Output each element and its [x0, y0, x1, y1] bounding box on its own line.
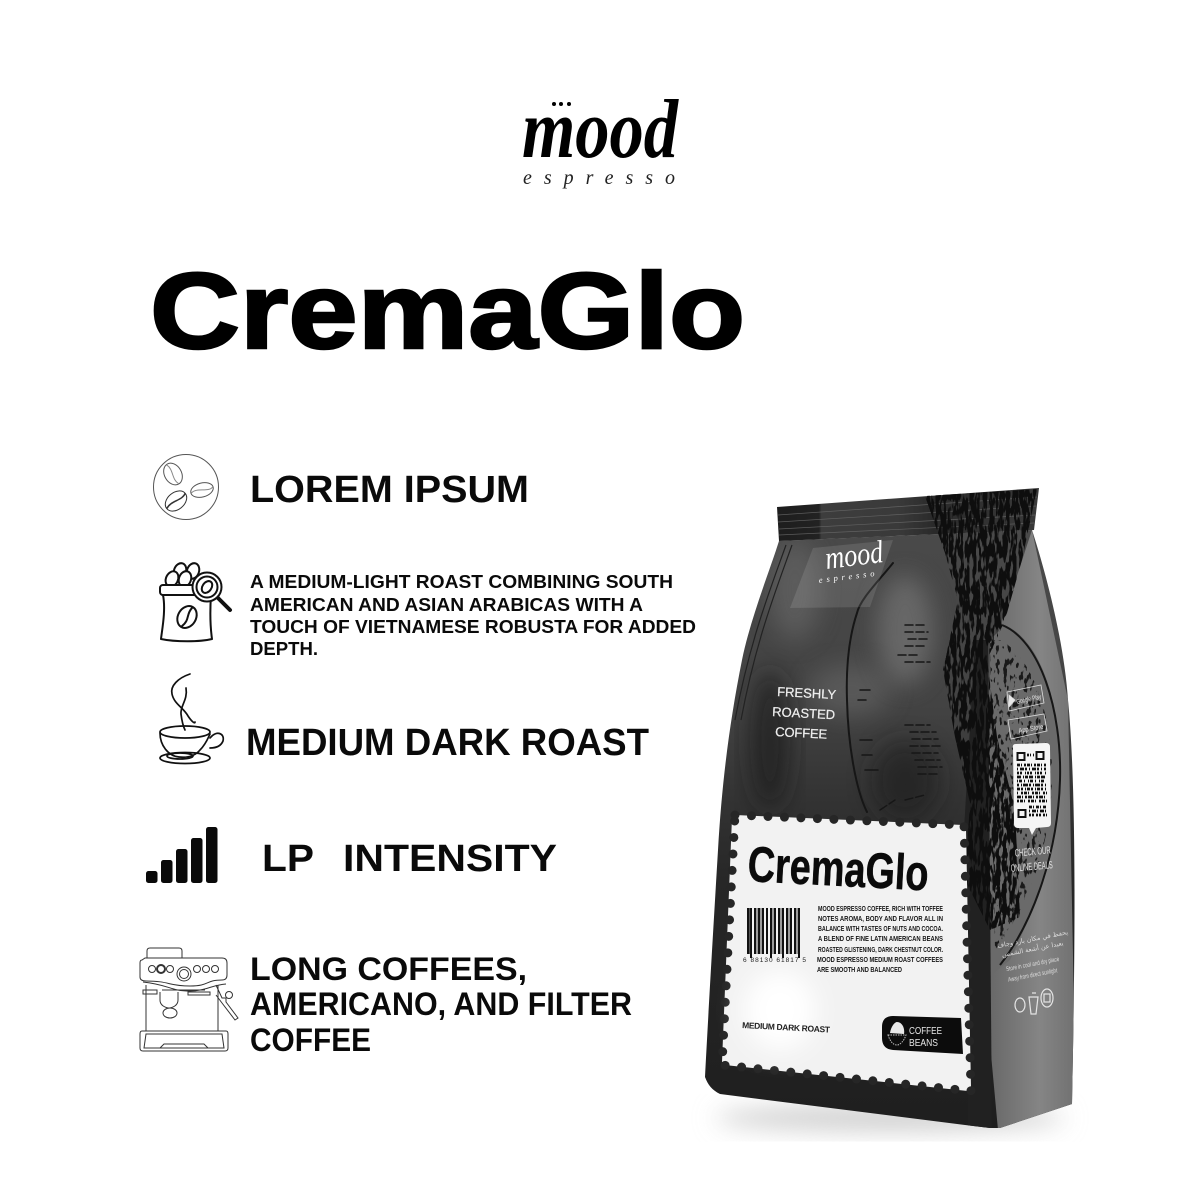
label description: ARE SMOOTH AND BALANCED: [817, 965, 903, 974]
text: online deals: CHECK OUR: [1014, 844, 1051, 860]
bag body: [700, 520, 1080, 1140]
coffee beans badge: [882, 1016, 963, 1054]
icon: espresso machine: [140, 948, 238, 1051]
text: storage instructions: بعيدا عن أشعة الشمس: [1001, 938, 1064, 959]
QR code: [1013, 743, 1051, 835]
bean outline and hatching: [847, 563, 942, 812]
icon: steaming cup: [160, 674, 223, 764]
front edge fold: [964, 640, 992, 1130]
text: roast description: DEPTH.: [250, 638, 318, 659]
label: intensity: LP: [262, 838, 314, 880]
label description: A BLEND OF FINE LATIN AMERICAN BEANS: [818, 934, 943, 943]
label description: BALANCE WITH TASTES OF NUTS AND COCOA.: [818, 924, 943, 933]
text: online deals: [1010, 844, 1053, 875]
coffee beans badge: COFFEE: [909, 1025, 942, 1037]
label: long coffees: AMERICANO, AND FILTER: [250, 986, 632, 1022]
recycling icons: [1015, 989, 1053, 1014]
gusset side panel: [986, 530, 1076, 1130]
text: roast description: AMERICAN AND ASIAN ARABICAS WITH A: [250, 594, 643, 615]
logo panel: [790, 540, 893, 608]
text: storage instructions: يحفظ في مكان بارد وجاف: [997, 928, 1069, 950]
icon: intensity bars: [146, 827, 218, 883]
white stamp label: [722, 815, 971, 1091]
gusset hatching: [990, 640, 1052, 950]
bag shadow: [715, 1105, 1065, 1131]
barcode: [743, 908, 806, 964]
logo: mood espresso: mood: [522, 83, 680, 176]
bean engraved band: [925, 489, 1037, 930]
side badges and QR: [1007, 685, 1051, 835]
text: freshly roasted coffee: FRESHLY: [777, 684, 837, 702]
store badges: [1007, 685, 1047, 739]
title: CremaGlo: [150, 250, 745, 371]
coffee bag product: [700, 488, 1080, 1140]
text: freshly roasted coffee: [772, 684, 837, 742]
label roast: MEDIUM DARK ROAST: [742, 1020, 831, 1035]
text: roast description: A MEDIUM-LIGHT ROAST COMBINING SOUTH: [250, 571, 673, 592]
text: storage instructions: Store in cool and dry place: [1006, 956, 1060, 973]
icon: coffee bag with magnifier: [160, 561, 230, 641]
label: lorem ipsum: LOREM IPSUM: [250, 469, 529, 511]
side badges and QR: Google Play: [1016, 694, 1042, 706]
bag logo: espresso: [818, 568, 875, 585]
barcode: 6 88130 61817 5: [743, 957, 806, 964]
logo: mood espresso: espresso: [523, 167, 675, 189]
text: freshly roasted coffee: COFFEE: [775, 724, 828, 742]
label description: MOOD ESPRESSO MEDIUM ROAST COFFEES: [817, 955, 943, 964]
label: long coffees: COFFEE: [250, 1022, 371, 1058]
text: freshly roasted coffee: ROASTED: [772, 704, 836, 722]
label: intensity: [262, 838, 557, 880]
side badges and QR: App Store: [1018, 724, 1044, 735]
label description: MOOD ESPRESSO COFFEE, RICH WITH TOFFEE: [818, 904, 943, 913]
label: intensity: INTENSITY: [343, 838, 557, 880]
text: roast description: TOUCH OF VIETNAMESE ROBUSTA FOR ADDED: [250, 616, 696, 637]
icon: coffee beans in circle: [154, 454, 218, 520]
label description: NOTES AROMA, BODY AND FLAVOR ALL IN: [818, 914, 943, 923]
label description: [817, 904, 943, 974]
text: online deals: ONLINE DEALS: [1010, 859, 1053, 875]
text: roast description: [250, 571, 696, 659]
coffee beans badge: BEANS: [909, 1037, 938, 1049]
left fold lines: [735, 545, 792, 720]
label: roast level: MEDIUM DARK ROAST: [246, 722, 649, 764]
label description: ROASTED GLISTENING, DARK CHESTNUT COLOR.: [818, 945, 943, 954]
bag logo: [814, 533, 887, 585]
label: long coffees: LONG COFFEES,: [250, 951, 527, 987]
top seal: [777, 488, 1039, 541]
label title: CremaGlo: [746, 836, 930, 901]
bag logo: mood: [823, 533, 886, 576]
text: storage instructions: [997, 928, 1069, 984]
text: storage instructions: Away from direct sunlight: [1008, 967, 1058, 984]
label: long coffees: [250, 951, 632, 1058]
